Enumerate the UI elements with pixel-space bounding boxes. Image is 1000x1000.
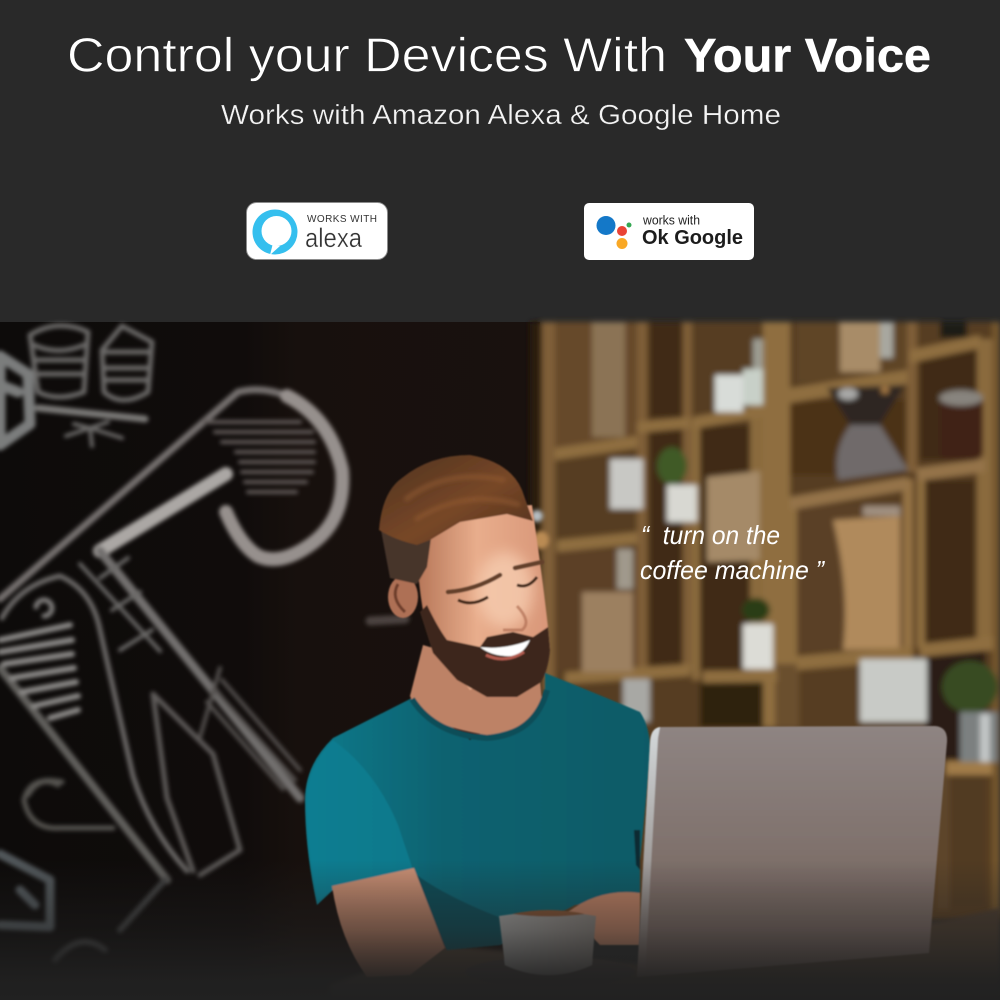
shelf objects: coffee bags, pots, plants — [582, 322, 998, 762]
coffee cup and saucer — [465, 910, 635, 987]
google label: works with — [642, 212, 700, 228]
face — [417, 505, 550, 690]
hand on laptop — [568, 892, 640, 945]
bottom shade — [0, 860, 1000, 1000]
chalk frame top left — [0, 356, 30, 445]
alexa label — [305, 214, 377, 253]
beard — [420, 605, 550, 697]
forearm — [332, 868, 445, 977]
side fade hair — [381, 525, 431, 584]
nose shadow — [503, 606, 526, 630]
cheek highlight — [477, 552, 533, 628]
alexa label: alexa — [305, 223, 363, 253]
person — [305, 455, 650, 977]
ear — [388, 576, 418, 618]
subtitle: Works with Amazon Alexa & Google Home — [221, 99, 781, 130]
sleeve highlight — [307, 740, 414, 900]
chalk drawing — [0, 326, 405, 960]
collar — [412, 690, 547, 738]
google label — [642, 212, 743, 249]
badge: works with ok google — [584, 203, 754, 260]
alexa label: WORKS WITH — [307, 214, 377, 225]
google label: Ok Google — [642, 227, 743, 249]
blurred lamp glow — [531, 510, 549, 549]
chalk scroll — [0, 390, 287, 599]
chalk cups — [30, 326, 152, 446]
chalk swirl and hatch — [36, 600, 52, 616]
badge: works with alexa — [246, 202, 388, 260]
speech quote: “ turn on the — [641, 520, 780, 550]
speech quote — [640, 520, 825, 585]
shelf boards — [555, 335, 993, 775]
icon: google assistant dots — [596, 216, 632, 249]
laptop — [637, 726, 947, 977]
title — [67, 28, 931, 82]
shelf uprights — [542, 322, 1000, 912]
icon: alexa ring — [252, 210, 298, 255]
t-shirt — [305, 673, 650, 950]
table — [330, 908, 1000, 1000]
smile — [480, 640, 530, 656]
hair top — [379, 455, 533, 545]
neck — [410, 645, 542, 735]
title: Your Voice — [684, 28, 931, 82]
shirt shadow — [634, 830, 640, 870]
shelf cell shading — [650, 322, 985, 906]
brows and eyes — [448, 562, 542, 592]
cafe photo panel — [0, 322, 1000, 1000]
title: Control your Devices With — [67, 30, 667, 82]
hair highlights — [405, 477, 520, 520]
wooden shelving — [530, 322, 1000, 920]
header panel — [0, 0, 1000, 322]
speech quote: coffee machine ” — [640, 555, 825, 585]
dark chalkboard wall — [0, 322, 540, 1000]
